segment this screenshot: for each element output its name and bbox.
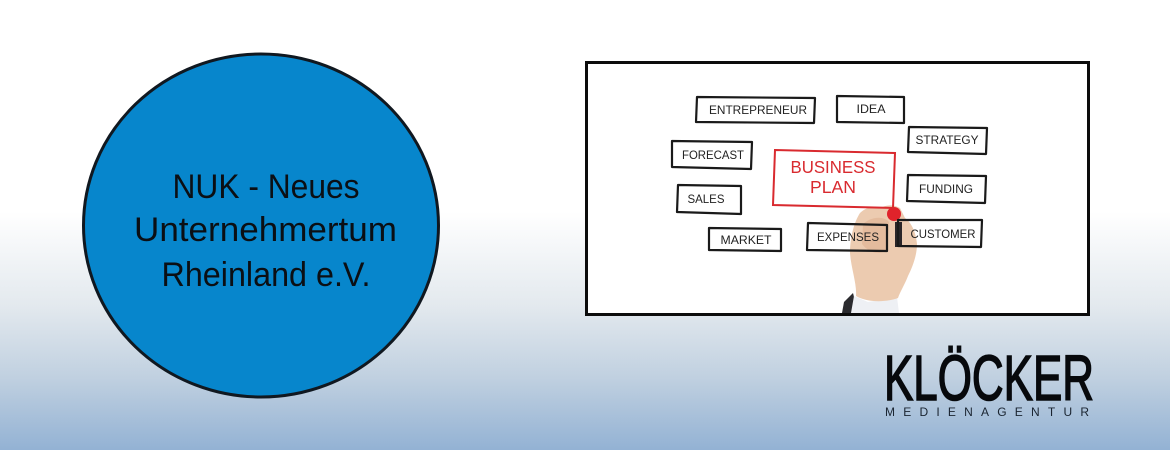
box labels: SALES — [688, 192, 724, 206]
panel: business plan picture — [586, 62, 1088, 314]
box labels: CUSTOMER — [910, 227, 976, 241]
business plan label — [790, 157, 876, 197]
business plan label: BUSINESS — [790, 157, 876, 177]
title text: Rheinland e.V. — [162, 256, 370, 294]
logo tagline: MEDIENAGENTUR — [885, 405, 1089, 419]
word boxes — [672, 96, 987, 251]
icon: hand with marker — [842, 205, 917, 313]
business plan label: PLAN — [810, 177, 856, 197]
box labels — [682, 102, 978, 247]
box labels: FUNDING — [919, 182, 973, 196]
box labels: EXPENSES — [817, 230, 879, 244]
circle shape — [84, 54, 438, 397]
logo: Klöcker Medienagentur — [884, 342, 1094, 419]
box labels: MARKET — [720, 233, 772, 247]
box labels: STRATEGY — [916, 133, 978, 147]
title text: NUK - Neues — [172, 168, 360, 206]
box labels: ENTREPRENEUR — [709, 103, 807, 117]
title text — [134, 168, 397, 294]
picture frame — [586, 62, 1088, 314]
title text: Unternehmertum — [134, 211, 397, 249]
box labels: IDEA — [856, 102, 886, 116]
panel: blue circle with title — [84, 54, 438, 397]
business plan box — [773, 150, 895, 208]
box labels: FORECAST — [682, 148, 745, 162]
